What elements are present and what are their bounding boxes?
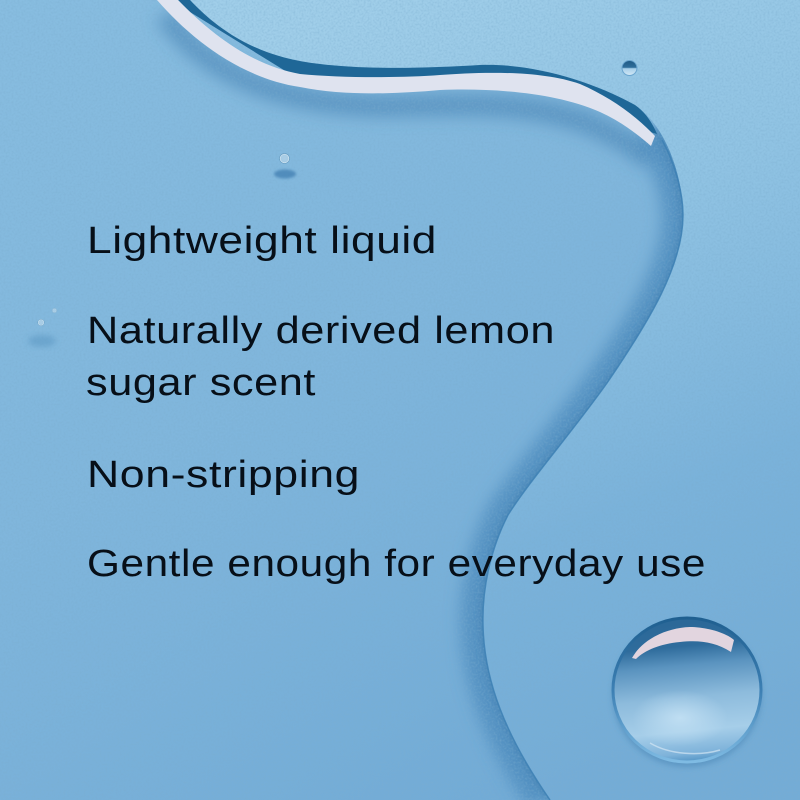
tiny droplet with shadow (274, 154, 296, 178)
droplet body (612, 617, 762, 763)
item: gentle everyday: Gentle enough for everyday use (87, 543, 706, 585)
droplet lower glow (642, 694, 716, 740)
dark band next to the edge (483, 130, 683, 800)
dark top edge of ribbon (178, 0, 657, 134)
droplet bottom reflection (650, 743, 720, 754)
wide liquid band (479, 130, 680, 800)
feature list (86, 220, 706, 585)
shadow under ribbon (165, 15, 650, 160)
item: lemon sugar scent (86, 310, 555, 404)
small droplet top right (622, 60, 637, 76)
item: lightweight liquid: Lightweight liquid (87, 220, 437, 262)
droplet shadow (612, 621, 762, 767)
item: lemon sugar scent: Naturally derived lemon (87, 310, 555, 352)
item: lemon sugar scent: sugar scent (86, 362, 316, 404)
droplet pink highlight (632, 627, 734, 659)
white ribbon highlight (157, 0, 655, 146)
tiny droplets left (28, 308, 57, 347)
region beyond the liquid edge (190, 0, 800, 800)
large water droplet (612, 617, 762, 767)
droplet rim (613, 618, 761, 762)
item: non-stripping: Non-stripping (87, 454, 360, 496)
liquid edge line (483, 140, 683, 800)
liquid soft shadows clipped to the liquid side (165, 15, 683, 800)
